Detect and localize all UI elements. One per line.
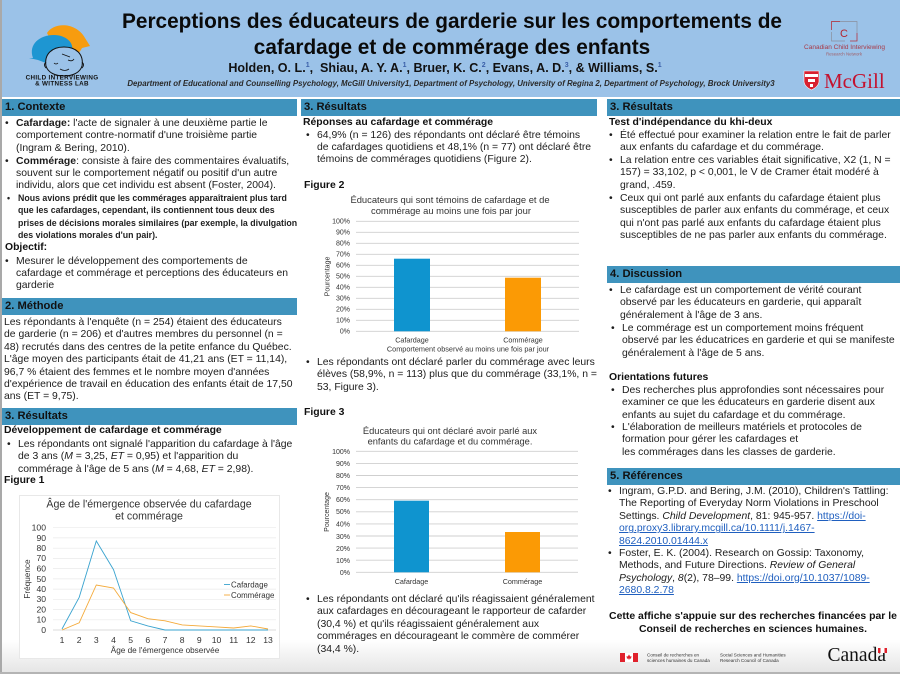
bullet: cafardage (620, 285, 861, 322)
heading: discussion (607, 266, 900, 283)
figure 3 label: Figure 3 (304, 407, 344, 418)
bullet: apparition: Les répondants ont signalé l'apparition du cafardage à l'âge (18, 439, 292, 450)
text block: methode: de garderie (n = 206) et d'autres membres du personnel (n = (4, 329, 283, 340)
x axis labels: 9 (197, 635, 202, 645)
series: commerage (62, 585, 268, 630)
funding note (609, 611, 897, 635)
reference: ingram: org.proxy3.library.mcgill.ca/10.1111/j.1467- (619, 523, 815, 534)
y axis labels: 30% (336, 534, 350, 541)
x axis labels: 1 (60, 635, 65, 645)
y axis labels: 60% (336, 262, 350, 270)
panel: resultats reponses (301, 99, 597, 191)
bullet: parle: susceptibles de ne pas parler aux enfants du commérage. (620, 230, 887, 241)
reference: ingram: Ingram, G.P.D. and Bering, J.M. (2010), Children's Tattling: (619, 486, 889, 497)
subheading: orientations: Orientations futures (609, 372, 708, 383)
y axis labels (332, 218, 350, 336)
bullet: commerage: individu, alors que cet individu est absent (Foster, 2004). (16, 180, 276, 191)
y axis labels: 10 (36, 614, 46, 624)
x labels: Commérage (503, 336, 543, 344)
axis titles: Âge de l'émergence observée (111, 645, 220, 655)
logo: SSHRC Canada footer (620, 645, 887, 666)
y axis labels: 70% (336, 485, 350, 492)
authors: Holden, O. L.1, Shiau, A. Y. A.1, Bruer, K. C.2, Evans, A. D.3, & Williams, S.1 (228, 60, 662, 74)
heading: references: 5. Références (610, 470, 683, 482)
logo: Canadian Child Interviewing: Research Network (826, 52, 863, 56)
legend: Cafardage (231, 580, 268, 590)
x labels: Commérage (503, 577, 542, 586)
title: Perceptions des éducateurs de garderie sur les comportements de (122, 10, 782, 33)
x axis labels: 10 (212, 635, 221, 645)
bullet: objectif: Mesurer le développement des comportements de (16, 256, 248, 266)
y axis labels: 100 (32, 522, 46, 532)
bullet: parler (317, 357, 597, 394)
panel: references (607, 468, 900, 596)
y axis labels: 20% (336, 546, 350, 553)
x labels: Cafardage (395, 336, 429, 344)
bullet: recherches (622, 385, 884, 422)
bullet: objectif: garderie (16, 280, 54, 291)
subheading: developpement: Développement de cafardage et commérage (4, 425, 222, 436)
bullet: reagir: aux cafardages en décourageant le rapporteur de cafarder (317, 606, 586, 617)
bullet: parle: Ceux qui ont parlé aux enfants du cafardage étaient plus (620, 193, 881, 204)
y axis labels: 80 (36, 543, 46, 553)
bar: commerage (505, 532, 540, 572)
x axis labels (60, 635, 273, 645)
reference: foster: Foster, E. K. (2004). Research on Gossip: Taxonomy, (619, 548, 864, 559)
bar: cafardage (394, 259, 430, 331)
chart title: Éducateurs qui ont déclaré avoir parlé aux (363, 426, 537, 436)
bullet: materiels: formation pour gérer les cafardages et (622, 434, 798, 445)
bullet: parler: 53, Figure 3). (317, 382, 379, 393)
bullet: parle: qui n'ont pas parlé aux enfants du cafardage étaient plus (620, 218, 881, 229)
subheading: test: Test d'indépendance du khi-deux (609, 117, 772, 128)
logo: McGill: McGill (824, 69, 885, 93)
bullet: relation: 157) = 33,102, p < 0,001, le V de Cramer était modéré à (620, 167, 879, 178)
funding note: Conseil de recherches en sciences humaines. (639, 624, 867, 635)
bullet: parler: élèves (58,9%, n = 113) plus que du commérage (33,1%, n = (317, 369, 597, 380)
chart title: Âge de l'émergence observée du cafardage (46, 498, 252, 510)
bottom edge line (0, 672, 900, 674)
text block: methode (4, 317, 293, 402)
footer shade (0, 640, 900, 674)
y axis title: Pourcentage (324, 257, 332, 296)
text block: methode: L'âge moyen des participants était de 41,21 ans (ET = 11,14), (4, 354, 287, 365)
bullet: commerage: Le commérage est un comportement moins fréquent (622, 323, 863, 334)
bullet: cafardage: (Ingram & Bering, 2010). (16, 143, 130, 154)
bullet: materiels: L'élaboration de meilleurs matériels et protocoles de (622, 422, 862, 433)
text block: methode: 96,7 % étaient des femmes et le nombre moyen d'années (4, 367, 269, 378)
figure 1 label: Figure 1 (4, 475, 44, 486)
bullet: hypothese: des violations morales d'un pair). (18, 230, 157, 240)
logo: SSHRC Canada footer: sciences humaines du Canada (647, 658, 710, 663)
funding note: Cette affiche s'appuie sur des recherches financées par le (609, 611, 897, 622)
logo: SSHRC Canada footer: Research Council of Canada (720, 658, 779, 663)
y axis labels: 30% (336, 296, 350, 302)
reference: ingram: The Reporting of Everyday Norm Violations in Preschool (619, 498, 879, 509)
line chart: figure 1 (19, 495, 280, 658)
figure 2 label: Figure 2 (304, 180, 344, 191)
left edge strip (0, 0, 2, 674)
reference: ingram: 8624.2010.01444.x (619, 536, 708, 547)
x axis labels: 2 (77, 635, 82, 645)
header band (0, 0, 900, 97)
reference: ingram: Settings. Child Development, 81: 945-957. https://doi- (619, 511, 866, 522)
bullet: objectif: cafardage et commérage et perceptions des éducateurs en (16, 268, 288, 279)
bullet: parler: Les répondants ont déclaré parler du commérage avec leurs (317, 357, 595, 368)
text block: definitions (5, 118, 297, 291)
bullet: commerage (622, 323, 895, 360)
bullet: cafardage: Cafardage: l'acte de signaler à une deuxième partie le (16, 118, 268, 129)
y axis labels: 70 (36, 553, 46, 563)
bullet: recherches: enfants au sujet du cafardage et du commérage. (622, 410, 846, 421)
logo: child interviewing and witness lab: CHILD INTERVIEWING (26, 74, 98, 82)
x axis labels: 12 (246, 635, 256, 645)
y axis labels: 50% (336, 509, 350, 516)
heading: resultats: 3. Résultats (5, 410, 68, 422)
y axis labels: 80% (336, 240, 350, 248)
x axis labels: 4 (111, 635, 116, 645)
logo: Canadian Child Interviewing: C (840, 28, 848, 40)
bar chart: figure 3 (324, 426, 578, 586)
wordmark: Canada: Canada (828, 645, 886, 666)
heading: methode: 2. Méthode (5, 300, 63, 312)
bullet: cafardage: généralement à l'âge de 3 ans. (620, 310, 762, 321)
bullet: reagir: Les répondants ont déclaré qu'ils réagissaient généralement (317, 594, 595, 605)
y axis labels: 80% (336, 473, 350, 480)
x labels: Comportement observé au moins une fois par jour (387, 344, 550, 354)
bullet: apparition: commérage à l'âge de 5 ans (M = 4,68, ET = 2,98). (18, 464, 253, 475)
bullet: hypothese: que les cafardages, cependant, ils contiennent tous deux des (18, 205, 275, 215)
icon: flag (620, 653, 638, 662)
bullet: reagir (317, 594, 595, 656)
bullet: parle: susceptibles de parler aux enfants du commérage, et ceux (620, 205, 889, 216)
bullet: effectue (620, 130, 891, 155)
title: cafardage et de commérage des enfants (254, 36, 650, 59)
bullet: cafardage: comportement contre-normatif d'une troisième partie (16, 130, 257, 141)
panel: discussion (607, 266, 900, 458)
bullet: reagir: commérages en décourageant le commère de commérer (317, 631, 579, 642)
logo: SSHRC Canada footer: Conseil de recherches en (647, 652, 700, 658)
heading: references (607, 468, 900, 485)
y axis labels: 10% (336, 558, 350, 565)
y axis labels: 30 (36, 594, 46, 604)
x labels (395, 577, 542, 586)
bullet: parle (620, 193, 889, 243)
subheading: objectif: Objectif: (5, 242, 47, 253)
logo: Canadian Child Interviewing: Canadian Child Interviewing (804, 44, 885, 51)
panel: contexte (2, 99, 297, 291)
affiliations: Department of Educational and Counselling Psychology, McGill University1, Department of Psychology, University of Regina 2, Department of Psychology, Brock University3 (127, 79, 775, 88)
bullet: effectue: Été effectué pour examiner la relation entre le fait de parler (620, 130, 891, 141)
text block: methode: d'expérience de travail en éducation des enfants était de 17,50 (4, 379, 293, 390)
legend: Commérage (231, 591, 275, 600)
y axis labels: 20% (336, 306, 350, 314)
title (122, 10, 782, 59)
text block: methode: 48) recrutés dans des centres de la petite enfance du Québec. (4, 342, 292, 353)
bullet: apparition: de 3 ans (M = 3,25, ET = 0,95) et l'apparition du (18, 451, 238, 462)
line chart: figure 1: et commérage (115, 510, 183, 522)
bullet: hypothese: Nous avions prédit que les commérages apparaîtraient plus tard (18, 193, 287, 203)
y axis labels: 90 (36, 533, 46, 543)
heading: resultats (607, 99, 900, 116)
y axis labels: 40 (36, 584, 46, 594)
bullet: effectue: aux enfants du cafardage et du commérage. (620, 142, 824, 153)
y axis labels: 0% (340, 570, 350, 577)
legend (224, 580, 275, 600)
y axis labels: 100% (332, 218, 350, 226)
bar chart: figure 2: commérage au moins une fois par jour (371, 205, 531, 216)
logo: child interviewing and witness lab: & WITNESS LAB (35, 80, 89, 88)
y axis labels: 90% (336, 461, 350, 468)
heading: discussion: 4. Discussion (610, 268, 682, 280)
bullet: hypothese: prises de décisions morales similaires (par exemple, la divulgation (18, 218, 297, 228)
x axis labels: 5 (128, 635, 133, 645)
y axis labels (332, 449, 350, 577)
bullet: relation (620, 155, 891, 192)
bullet: temoins (317, 130, 591, 167)
bullet: commerage: Commérage: consiste à faire des commentaires évaluatifs, (16, 156, 289, 166)
subheading: reponses: Réponses au cafardage et commérage (303, 117, 493, 128)
bullet: cafardage: Le cafardage est un comportement de vérité courant (620, 285, 861, 296)
x axis labels: 3 (94, 635, 99, 645)
y axis labels: 60% (336, 497, 350, 504)
bullet: relation: La relation entre ces variables était significative, X2 (1, N = (620, 155, 891, 166)
y axis labels: 40% (336, 522, 350, 528)
reference: foster: Methods, and Future Directions. Review of General (619, 560, 855, 571)
reference: foster: Psychology, 8(2), 78–99. https://doi.org/10.1037/1089- (619, 573, 870, 584)
bar chart: figure 3: enfants du cafardage et du commérage. (368, 436, 532, 446)
panel: methode (2, 298, 297, 402)
x axis labels: 13 (263, 635, 273, 645)
y axis labels: 10% (336, 318, 350, 324)
heading: contexte (2, 99, 297, 116)
x axis labels: 6 (145, 635, 150, 645)
y axis labels: 50 (36, 574, 46, 584)
bar chart: figure 2 (324, 194, 579, 354)
line chart: figure 1: Fréquence (23, 559, 32, 599)
y axis labels: 40% (336, 284, 350, 292)
x labels (387, 336, 550, 354)
bullet: hypothese (18, 192, 297, 242)
chart title: Éducateurs qui sont témoins de cafardage et de (350, 194, 550, 205)
bullet: cafardage: observé par les éducateurs en garderie, qui apparaît (620, 297, 861, 308)
y axis title: Pourcentage (324, 492, 331, 532)
bullet: reagir: (30,4 %) et qu'ils réagissaient généralement aux (317, 619, 539, 630)
bar: cafardage (394, 501, 429, 572)
bullet: commerage: observé par les éducatrices en garderie et qui se manifeste (622, 335, 895, 346)
y axis labels: 60 (36, 564, 46, 574)
bullet: recherches: examiner ce que les éducateurs en garderie disent aux (622, 397, 875, 408)
y axis labels: 70% (336, 252, 350, 258)
y axis labels: 100% (332, 449, 350, 456)
x labels: Cafardage (395, 577, 428, 586)
logo: Canadian Child Interviewing (804, 21, 885, 56)
bullet: reagir: (34,4 %). (317, 644, 359, 655)
panel: resultats khi-deux (607, 99, 900, 241)
heading: resultats: 3. Résultats (610, 101, 673, 113)
y axis labels: 0% (340, 328, 350, 336)
bullet: temoins: témoins de commérages quotidiens (Figure 2). (317, 154, 532, 165)
bullet: recherches: Des recherches plus approfondies sont nécessaires pour (622, 385, 884, 396)
bullet: commerage: souvent sur le comportement négatif ou positif d'un autre (16, 168, 277, 179)
heading: contexte: 1. Contexte (5, 101, 65, 113)
logo: child interviewing and witness lab (26, 25, 98, 88)
bullet: apparition (18, 439, 292, 476)
y axis labels: 90% (336, 230, 350, 236)
text block: methode: ans (ET = 9,75). (4, 391, 79, 402)
logo: SSHRC Canada footer: Social Sciences and Humanities (720, 652, 786, 658)
bullet: commerage (16, 156, 289, 193)
bullet: relation: grand, .459. (620, 180, 675, 191)
bullet: temoins: de cafardages quotidiens et 48,1% (n = 77) ont déclaré être (317, 142, 591, 153)
heading: resultats: 3. Résultats (304, 101, 367, 113)
y axis labels: 50% (336, 274, 350, 280)
bullet: temoins: 64,9% (n = 126) des répondants ont déclaré être témoins (317, 130, 580, 140)
bullet: objectif (16, 256, 288, 293)
bar: commerage (505, 278, 541, 331)
reference: foster: 2680.8.2.78 (619, 585, 674, 596)
panel: resultats developpement (2, 408, 297, 486)
reference: ingram (619, 486, 889, 548)
bullet: materiels: les commérages dans les classes de garderie. (622, 447, 836, 458)
y axis labels (32, 522, 46, 635)
text block: methode: Les répondants à l'enquête (n = 254) étaient des éducateurs (4, 317, 282, 328)
bullet: commerage: généralement à l'âge de 5 ans. (622, 348, 764, 359)
reference: foster (619, 548, 870, 598)
bullet: materiels (622, 422, 862, 459)
series: cafardage (62, 541, 268, 630)
x axis labels: 7 (163, 635, 168, 645)
x axis labels: 8 (180, 635, 185, 645)
x axis labels: 11 (229, 635, 238, 645)
heading: resultats (301, 99, 597, 116)
y axis labels: 0 (41, 625, 46, 635)
heading: resultats (2, 408, 297, 425)
heading: methode (2, 298, 297, 315)
y axis labels: 20 (36, 604, 46, 614)
bullet: cafardage (16, 118, 268, 155)
